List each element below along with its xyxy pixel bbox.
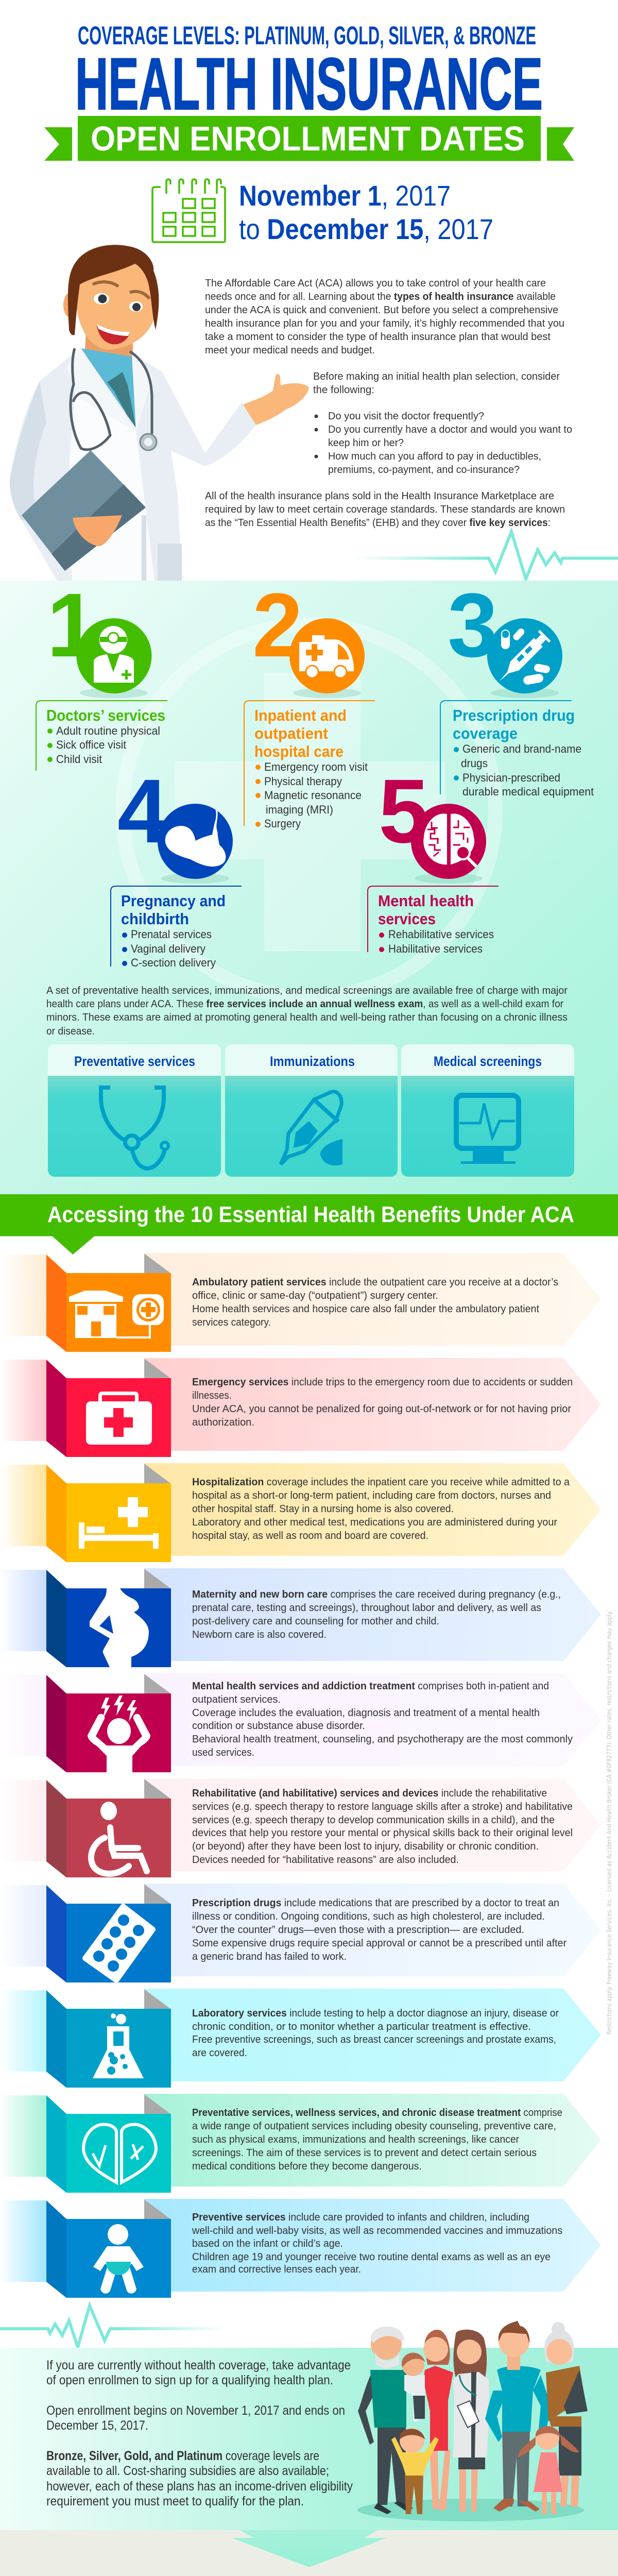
row 3: hospitalization: Laboratory and other medical test, medications you are administered during your <box>192 1516 557 1528</box>
row 1: ambulatory patient services: Ambulatory patient services include the outpatient care you receive at a doctor’s <box>192 1276 558 1288</box>
icon: hospital bed <box>79 1497 159 1549</box>
card: immunizations <box>225 1044 398 1177</box>
row 8: laboratory services: are covered. <box>192 2047 247 2059</box>
row 9: preventative and wellness services: a wide range of outpatient services including obesity counseling, preventive care, <box>192 2120 556 2132</box>
service 5: mental health services: services <box>378 910 436 928</box>
preventative text: health care plans under ACA. These free services include an annual wellness exam, as well as a well-child exam for <box>46 998 563 1010</box>
row 10: preventive services for children: exam and corrective lenses each year. <box>192 2263 361 2275</box>
open enrollment text: Bronze, Silver, Gold, and Platinum coverage levels are <box>46 2449 319 2463</box>
hair <box>68 245 159 335</box>
row 1: ambulatory patient services: office, clinic or same-day (“outpatient”) surgery center. <box>192 1290 438 1301</box>
icon: calendar <box>152 179 225 242</box>
mother <box>423 2330 453 2510</box>
row 4: maternity and newborn care: prenatal care, testing and screeings), throughout labor and delivery, as well as <box>192 1602 541 1614</box>
service 1: doctors' services: 1 <box>47 575 97 676</box>
row 9: preventative and wellness services <box>0 2094 601 2193</box>
row 7: prescription drugs <box>0 1884 601 1982</box>
preventative text: minors. These exams are aimed at promoting general health and well-being rather than focusing on a chronic illness <box>46 1011 568 1023</box>
row 6: rehabilitative services: (or beyond) after they have been lost to injury, disability or chronic condition. <box>192 1840 539 1852</box>
row 3: hospitalization <box>0 1463 601 1562</box>
service 3: prescription drug coverage: coverage <box>453 724 518 742</box>
service 2: hospital care: Physical therapy <box>264 775 342 788</box>
doctor woman <box>453 2330 489 2512</box>
lower hand <box>73 515 122 546</box>
heartbeat line <box>355 532 618 579</box>
row 7: prescription drugs: Prescription drugs include medications that are prescribed by a doctor to treat an <box>192 1897 559 1909</box>
row 10: preventive services for children: well-child and well-baby visits, as well as recommended vaccines and immuzations <box>192 2225 562 2236</box>
checklist text: premiums, co-payment, and co-insurance? <box>328 464 520 476</box>
open enrollment text: Open enrollment begins on November 1, 2017 and ends on <box>46 2403 345 2418</box>
open enrollment text <box>46 2358 353 2509</box>
icon: doctor <box>94 626 134 683</box>
row 2: emergency services: Emergency services include trips to the emergency room due to accidents or sudden <box>192 1376 573 1388</box>
illustration: doctor <box>10 245 309 581</box>
panel: open enrollment <box>0 2321 618 2530</box>
row 10: preventive services for children <box>0 2199 601 2298</box>
row 10: preventive services for children: based on the infant or child’s age. <box>192 2238 343 2249</box>
card: preventative services: Preventative services <box>74 1054 195 1069</box>
tie <box>107 372 136 428</box>
icon: first aid kit <box>86 1392 152 1445</box>
card: medical screenings <box>401 1044 574 1177</box>
preventative text: or disease. <box>46 1025 95 1037</box>
intro text: meet your medical needs and budget. <box>205 344 375 356</box>
service 5: mental health services: Mental health <box>378 892 474 910</box>
checklist text: the following: <box>313 384 374 396</box>
intro text <box>205 277 564 356</box>
grandfather <box>358 2327 413 2514</box>
service 4: pregnancy and childbirth: childbirth <box>121 910 189 928</box>
row 7: prescription drugs: a generic brand has failed to work. <box>192 1951 347 1962</box>
row 5: mental health services: Behavioral health treatment, counseling, and psychotherapy are the most commonly <box>192 1733 573 1745</box>
panel: five key services <box>0 575 618 1194</box>
row 2: emergency services <box>0 1358 601 1457</box>
checklist text: Do you currently have a doctor and would you want to <box>328 423 572 435</box>
service 5: mental health services <box>368 761 499 955</box>
service 2: hospital care: hospital care <box>254 742 344 760</box>
illustration: family <box>357 2321 588 2521</box>
icon: pill pack <box>85 1906 153 1980</box>
shirt <box>81 348 136 428</box>
row 6: rehabilitative services: devices that help you restore your mental or physical skills back to their original level <box>192 1827 573 1839</box>
banner: accessing the 10 essential health benefits <box>0 1194 618 1255</box>
row 7: prescription drugs: “Over the counter” drugs—even those with a prescription— are excluded. <box>192 1924 524 1936</box>
intro text: needs once and for all. Learning about the types of health insurance available <box>205 291 556 302</box>
service 4: pregnancy and childbirth: 4 <box>117 761 168 862</box>
row 4: maternity and newborn care <box>0 1568 601 1667</box>
row 7: prescription drugs: illness or condition. Ongoing conditions, such as high cholesterol, are included. <box>192 1910 545 1922</box>
coverage standards text: as the “Ten Essential Health Benefits” (EHB) and they cover five key services: <box>205 517 551 529</box>
card: immunizations: Immunizations <box>270 1054 355 1069</box>
icon: stethoscope <box>101 1088 168 1168</box>
open enrollment text: requirement you must meet to qualify for the plan. <box>46 2494 304 2509</box>
row 5: mental health services <box>0 1673 601 1772</box>
grandmother <box>544 2322 588 2506</box>
open enrollment text: however, each of these plans has an income-driven eligibility <box>46 2479 353 2494</box>
girl <box>518 2426 579 2514</box>
service 4: pregnancy and childbirth: Prenatal services <box>131 928 212 941</box>
open enrollment text: of open enrollmen to sign up for a qualifying health plan. <box>46 2373 333 2387</box>
coverage standards text: All of the health insurance plans sold in the Health Insurance Marketplace are <box>205 490 554 502</box>
service 3: prescription drug coverage <box>440 575 594 798</box>
service 1: doctors' services <box>36 575 167 771</box>
side disclaimer: Restrictions apply. Freeway Insurance Services, Inc. - Licensed as Accident And Health Broker (CA #0F82773). Other rates, restrictions and charges may apply. <box>605 1611 613 2035</box>
row 3: hospitalization: Hospitalization coverage includes the inpatient care you receive while admitted to a <box>192 1476 570 1488</box>
boy <box>391 2428 439 2514</box>
icon: hospital <box>69 1291 164 1338</box>
row 5: mental health services: outpatient services. <box>192 1693 281 1705</box>
intro text: take a moment to consider the type of health insurance plan that would best <box>205 331 551 343</box>
row 7: prescription drugs: Some expensive drugs require special approval or cannot be a prescribed until after <box>192 1937 566 1949</box>
lapels <box>67 346 136 432</box>
card: medical screenings: Medical screenings <box>434 1054 542 1069</box>
icon: syringe and pills <box>494 627 551 687</box>
service 2: hospital care: 2 <box>252 575 303 676</box>
row 6: rehabilitative services: Devices needed for “habilitative reasons” are also included. <box>192 1854 459 1866</box>
checklist text: keep him or her? <box>328 437 404 449</box>
row 9: preventative and wellness services: Preventative services, wellness services, and chronic disease treatment comprise <box>192 2107 562 2119</box>
row 2: emergency services: illnesses. <box>192 1389 232 1401</box>
checklist text: Do you visit the doctor frequently? <box>328 410 484 422</box>
baby <box>402 2352 425 2421</box>
open enrollment text: available to all. Cost-sharing subsidies are also available; <box>46 2464 329 2478</box>
coat <box>10 350 256 581</box>
row 10: preventive services for children: Preventive services include care provided to infants and children, including <box>192 2211 529 2223</box>
card: preventative services <box>48 1044 221 1177</box>
watermark: medical cross <box>123 624 495 997</box>
intro text: The Affordable Care Act (ACA) allows you to take control of your health care <box>205 277 546 289</box>
checklist text: How much can you afford to pay in deductibles, <box>328 450 541 462</box>
row 5: mental health services: condition or substance abuse disorder. <box>192 1720 365 1732</box>
father <box>485 2321 551 2512</box>
row 9: preventative and wellness services: medical conditions before they become dangerous. <box>192 2160 422 2172</box>
stethoscope <box>71 348 152 450</box>
row 8: laboratory services: chronic condition, or to monitor whether a particular treatment is effective. <box>192 2021 531 2032</box>
enrollment dates: November 1, 2017 <box>239 179 451 212</box>
service 5: mental health services: 5 <box>379 761 429 862</box>
icon: wheelchair <box>91 1827 147 1874</box>
icon: lab flask <box>93 2013 144 2078</box>
intro text: under the ACA is quick and convenient. But before you select a comprehensive <box>205 304 558 316</box>
service 4: pregnancy and childbirth <box>111 761 242 969</box>
intro text: health insurance plan for you and your family, it’s highly recommended that you <box>205 317 564 329</box>
service 2: hospital care: Emergency room visit <box>264 760 368 773</box>
row 1: ambulatory patient services <box>0 1253 601 1352</box>
hand <box>243 374 309 425</box>
icon: fetus <box>165 811 226 867</box>
service 1: doctors' services: Adult routine physical <box>56 724 160 737</box>
checklist text: Before making an initial health plan selection, consider <box>313 370 560 382</box>
row 5: mental health services: used services. <box>192 1747 254 1758</box>
row 10: preventive services for children: Children age 19 and younger receive two routine dental exams as well as an eye <box>192 2251 551 2263</box>
service 2: hospital care: outpatient <box>254 724 328 742</box>
neck <box>85 319 133 384</box>
service 4: pregnancy and childbirth: Vaginal delivery <box>131 942 205 955</box>
service 4: pregnancy and childbirth: Pregnancy and <box>121 892 226 910</box>
coverage standards text: required by law to meet certain coverage standards. These standards are known <box>205 503 565 515</box>
icon: monitor <box>456 1095 519 1164</box>
service 2: hospital care: Magnetic resonance <box>264 789 362 802</box>
face <box>63 293 77 317</box>
service 2: hospital care <box>244 575 375 830</box>
service 1: doctors' services: Sick office visit <box>56 738 126 751</box>
ribbon banner: open enrollment dates: OPEN ENROLLMENT DATES <box>91 120 525 158</box>
row 5: mental health services: Mental health services and addiction treatment comprises both in-patient and <box>192 1680 549 1692</box>
row 8: laboratory services: Laboratory services include testing to help a doctor diagnose an injury, disease or <box>192 2007 559 2019</box>
panel: coverage levels <box>0 2530 618 2576</box>
row 6: rehabilitative services <box>0 1778 601 1877</box>
preventative text <box>46 985 568 1037</box>
service 1: doctors' services: Child visit <box>56 753 102 766</box>
folder <box>22 450 146 571</box>
mouth <box>96 324 130 344</box>
service 2: hospital care: Surgery <box>264 817 301 830</box>
row 4: maternity and newborn care: post-delivery care and counseling for mother and child. <box>192 1615 439 1627</box>
row 1: ambulatory patient services: Home health services and hospice care also fall under the ambulatory patient <box>192 1303 539 1315</box>
row 8: laboratory services: Free preventive screenings, such as breast cancer screenings and prostate exams, <box>192 2033 556 2045</box>
row 4: maternity and newborn care: Newborn care is also covered. <box>192 1629 327 1640</box>
row 6: rehabilitative services: services (e.g. speech therapy to develop communication skills in a child), and the <box>192 1814 555 1826</box>
checklist text <box>313 370 572 476</box>
arrow <box>231 2530 387 2567</box>
icon: vaccine vial and drop <box>281 1092 342 1165</box>
icon: brain and magnifier <box>423 814 476 867</box>
preventative text: A set of preventative health services, immunizations, and medical screenings are available free of charge with major <box>46 985 568 996</box>
row 4: maternity and newborn care: Maternity and new born care comprises the care received during pregnancy (e.g., <box>192 1588 561 1600</box>
heartbeat line <box>0 2306 225 2347</box>
row 9: preventative and wellness services: screenings. The aim of these services is to prevent and detect certain serious <box>192 2147 537 2159</box>
row 9: preventative and wellness services: such as physical exams, immunizations and health screenings, like cancer <box>192 2133 519 2145</box>
icon: pregnant woman <box>90 1588 149 1667</box>
row 2: emergency services: authorization. <box>192 1416 254 1428</box>
service 3: prescription drug coverage: Physician-prescribed <box>462 771 560 784</box>
row 2: emergency services: Under ACA, you cannot be penalized for going out-of-network or for not having prior <box>192 1403 571 1415</box>
coverage standards text <box>205 490 565 529</box>
service 3: prescription drug coverage: 3 <box>448 575 498 676</box>
row 5: mental health services: Coverage includes the evaluation, diagnosis and treatment of a mental health <box>192 1707 540 1719</box>
icon: stressed person <box>88 1696 150 1772</box>
service 3: prescription drug coverage: Prescription drug <box>453 706 575 724</box>
service 2: hospital care: imaging (MRI) <box>266 803 333 816</box>
icon: ambulance <box>299 635 354 678</box>
row 3: hospitalization: hospital as a short-or long-term patient, including care from doctors, nurses and <box>192 1489 551 1501</box>
service 5: mental health services: Rehabilitative services <box>388 928 494 941</box>
icon: child <box>93 2224 144 2294</box>
icon: split heart <box>83 2125 156 2182</box>
row 3: hospitalization: other hospital staff. Stay in a nursing home is also covered. <box>192 1503 454 1515</box>
row 3: hospitalization: hospital stay, as well as room and board are covered. <box>192 1530 428 1541</box>
eyes <box>93 282 149 312</box>
enrollment dates: to December 15, 2017 <box>239 213 493 245</box>
service 3: prescription drug coverage: Generic and brand-name <box>462 742 581 755</box>
service 3: prescription drug coverage: durable medical equipment <box>462 785 594 798</box>
service 4: pregnancy and childbirth: C-section delivery <box>131 956 216 969</box>
open enrollment text: If you are currently without health coverage, take advantage <box>46 2358 351 2372</box>
service 1: doctors' services: Doctors’ services <box>46 706 165 724</box>
row 6: rehabilitative services: Rehabilitative (and habilitative) services and devices include the rehabilitative <box>192 1787 547 1799</box>
row 6: rehabilitative services: services (e.g. speech therapy to restore language skills after a stroke) and habilitative <box>192 1801 573 1812</box>
row 1: ambulatory patient services: services category. <box>192 1316 271 1328</box>
service 3: prescription drug coverage: drugs <box>461 757 488 770</box>
service 5: mental health services: Habilitative services <box>388 942 483 955</box>
open enrollment text: December 15, 2017. <box>46 2418 148 2433</box>
enrollment dates <box>239 179 493 245</box>
service 2: hospital care: Inpatient and <box>254 706 347 724</box>
row 8: laboratory services <box>0 1989 601 2088</box>
